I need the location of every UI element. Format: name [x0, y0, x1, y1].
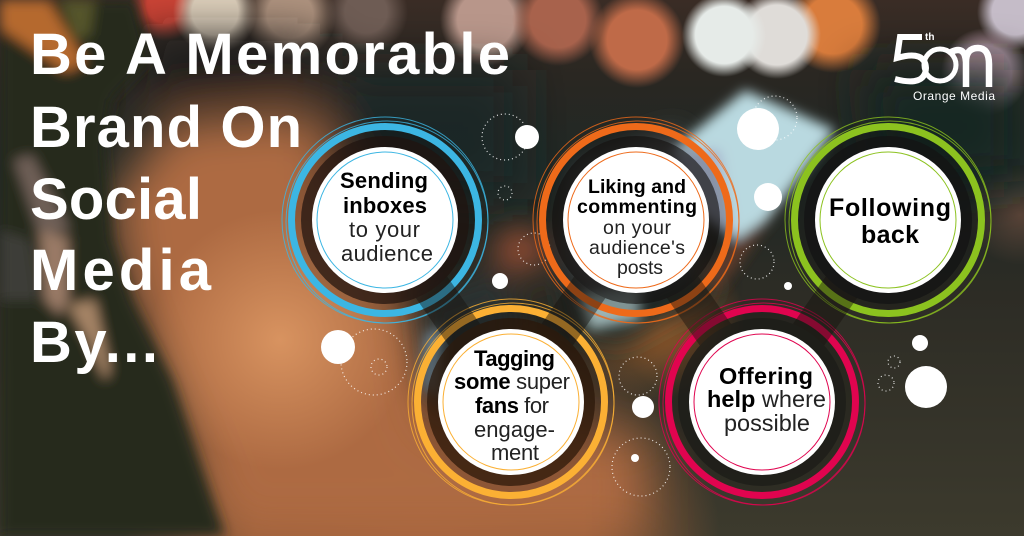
title: Brand On: [30, 95, 302, 160]
title: By...: [30, 310, 158, 375]
circle: tagging super fans (yellow): some super: [454, 369, 570, 394]
title: [30, 22, 510, 375]
circle: sending inboxes (blue): [282, 117, 488, 323]
circle: offering help (red): [659, 299, 865, 505]
circle: following back (green): back: [861, 221, 919, 249]
circle: liking and commenting (orange): posts: [617, 257, 663, 279]
circle: offering help (red): possible: [724, 410, 810, 436]
circle: tagging super fans (yellow): Tagging: [474, 346, 555, 371]
circle: liking and commenting (orange): audience's: [589, 237, 685, 259]
circle: liking and commenting (orange): [533, 117, 739, 323]
logo: 5th Orange Media: Orange Media: [913, 89, 995, 103]
circle: sending inboxes (blue): to your: [349, 217, 420, 242]
decorative bubbles: [321, 96, 947, 496]
circle: following back (green): [785, 117, 991, 323]
circle: liking and commenting (orange): commenting: [577, 196, 697, 218]
circle: tagging super fans (yellow): [408, 299, 614, 505]
logo: 5th Orange Media: [895, 32, 995, 103]
connector necks between circles: [416, 276, 856, 346]
circle: sending inboxes (blue): Sending: [340, 168, 428, 193]
circle: tagging super fans (yellow): ment: [491, 440, 539, 465]
circle: sending inboxes (blue): inboxes: [343, 193, 427, 218]
circle: offering help (red): Offering: [719, 363, 813, 389]
circle: following back (green): Following: [829, 194, 951, 222]
circle: liking and commenting (orange): on your: [603, 217, 672, 239]
circle: tagging super fans (yellow): fans for: [475, 393, 549, 418]
circle: tagging super fans (yellow): engage-: [474, 417, 555, 442]
title: Media: [30, 238, 212, 303]
circle: sending inboxes (blue): audience: [341, 241, 433, 266]
title: Be A Memorable: [30, 22, 510, 87]
title: Social: [30, 167, 202, 232]
circle: liking and commenting (orange): Liking and: [588, 176, 686, 198]
circle: offering help (red): help where: [707, 386, 826, 412]
logo: 5th Orange Media: th: [925, 32, 934, 43]
